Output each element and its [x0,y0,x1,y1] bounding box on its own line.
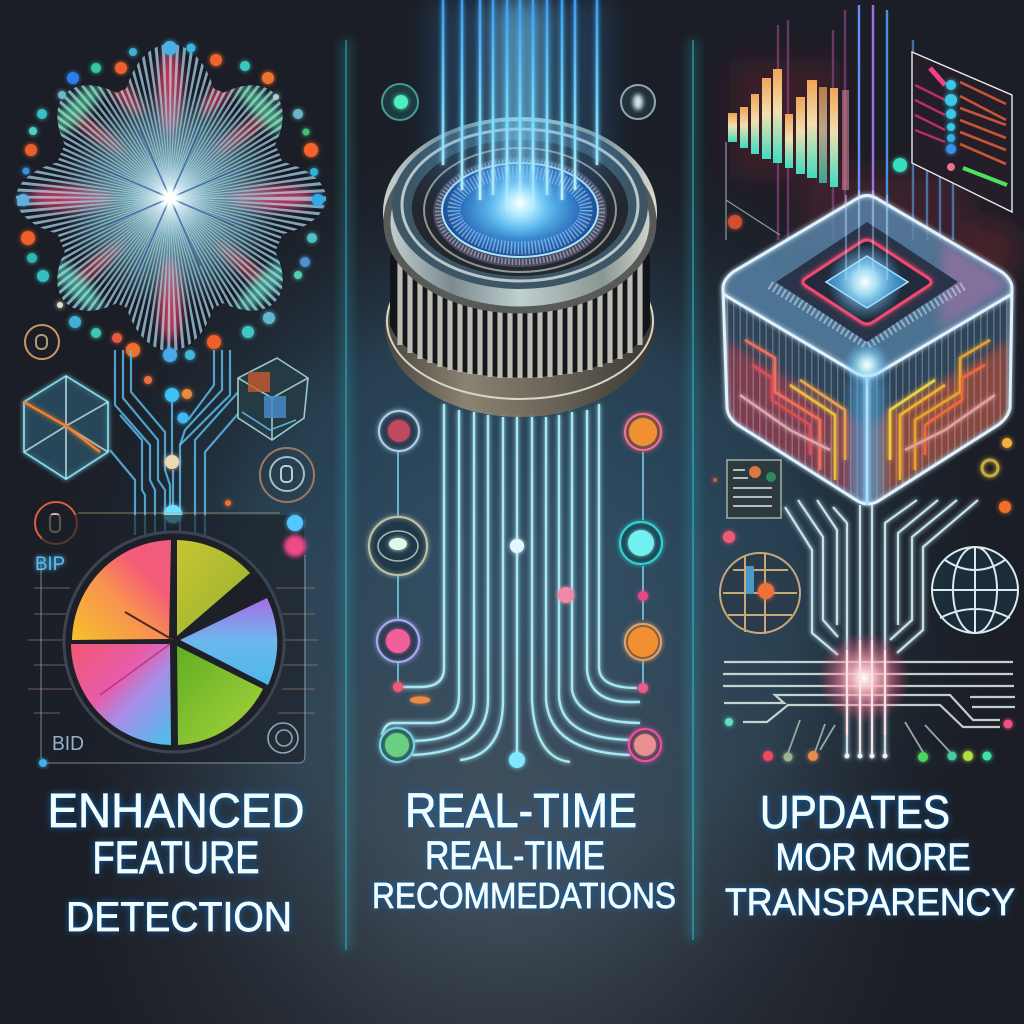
heading: real-time recommendations [372,785,676,916]
chart panel backing [42,515,304,762]
cube sides [725,297,1010,502]
side glows [713,158,1012,543]
panel: enhanced feature detection [10,30,330,767]
ribbed band [390,255,650,378]
heading: real-time recommendations: RECOMMEDATIONS [372,875,676,916]
circuit traces [110,350,250,535]
top ring [383,117,657,310]
heading: updates more transparency [725,786,1015,924]
icon: sensor globe left [720,553,800,634]
cube top face [723,196,1012,376]
icon: radial feature burst [16,44,326,350]
cube edges [723,196,1012,505]
small ring icons [25,325,314,544]
bottom node row [725,718,1012,762]
heading: enhanced feature detection: FEATURE [92,832,260,883]
cube circuit right [890,340,995,480]
blue chart label: BIP [35,554,65,575]
output traces [785,500,978,755]
top nodes [382,84,655,120]
circuit nodes [144,376,231,523]
blue iris [442,163,598,257]
icon: globe [932,547,1018,633]
heading: real-time recommendations: REAL-TIME [425,834,605,878]
icon: prism cube left [24,376,108,479]
ring of coloured nodes [17,41,324,362]
heading: enhanced feature detection: ENHANCED [48,785,304,838]
recommendation traces [382,404,640,762]
cube circuit left [740,340,845,480]
vertical beams [778,5,953,270]
heading: enhanced feature detection [48,785,304,940]
bottom chart label and ring icon: BID [52,733,84,755]
recommendation nodes [369,411,662,768]
glowing nodes [39,515,306,767]
column dividers [340,40,699,950]
chart grid [28,513,318,763]
bar chart [726,69,849,240]
icon: document [727,460,781,518]
heading: updates more transparency: MOR MORE [776,837,970,879]
icon: glass cube [720,196,1020,510]
red backing glow [730,60,1020,280]
beams over cube [846,190,887,280]
icon: cube right [238,358,308,440]
icon: lens cylinder [383,117,657,417]
central flare [818,632,910,755]
bottom rim [385,233,655,417]
heading: enhanced feature detection: DETECTION [66,893,292,940]
light beams [430,0,610,239]
heading: real-time recommendations: REAL-TIME [405,785,637,838]
pie chart [64,532,284,752]
panel: transparency [713,5,1020,762]
dashboard panel [912,52,1012,212]
bottom chart label and ring icon [52,723,298,755]
heading: updates more transparency: UPDATES [760,786,950,838]
panel: real-time recommendations [369,0,662,768]
horizontal bus lines [723,662,1015,753]
